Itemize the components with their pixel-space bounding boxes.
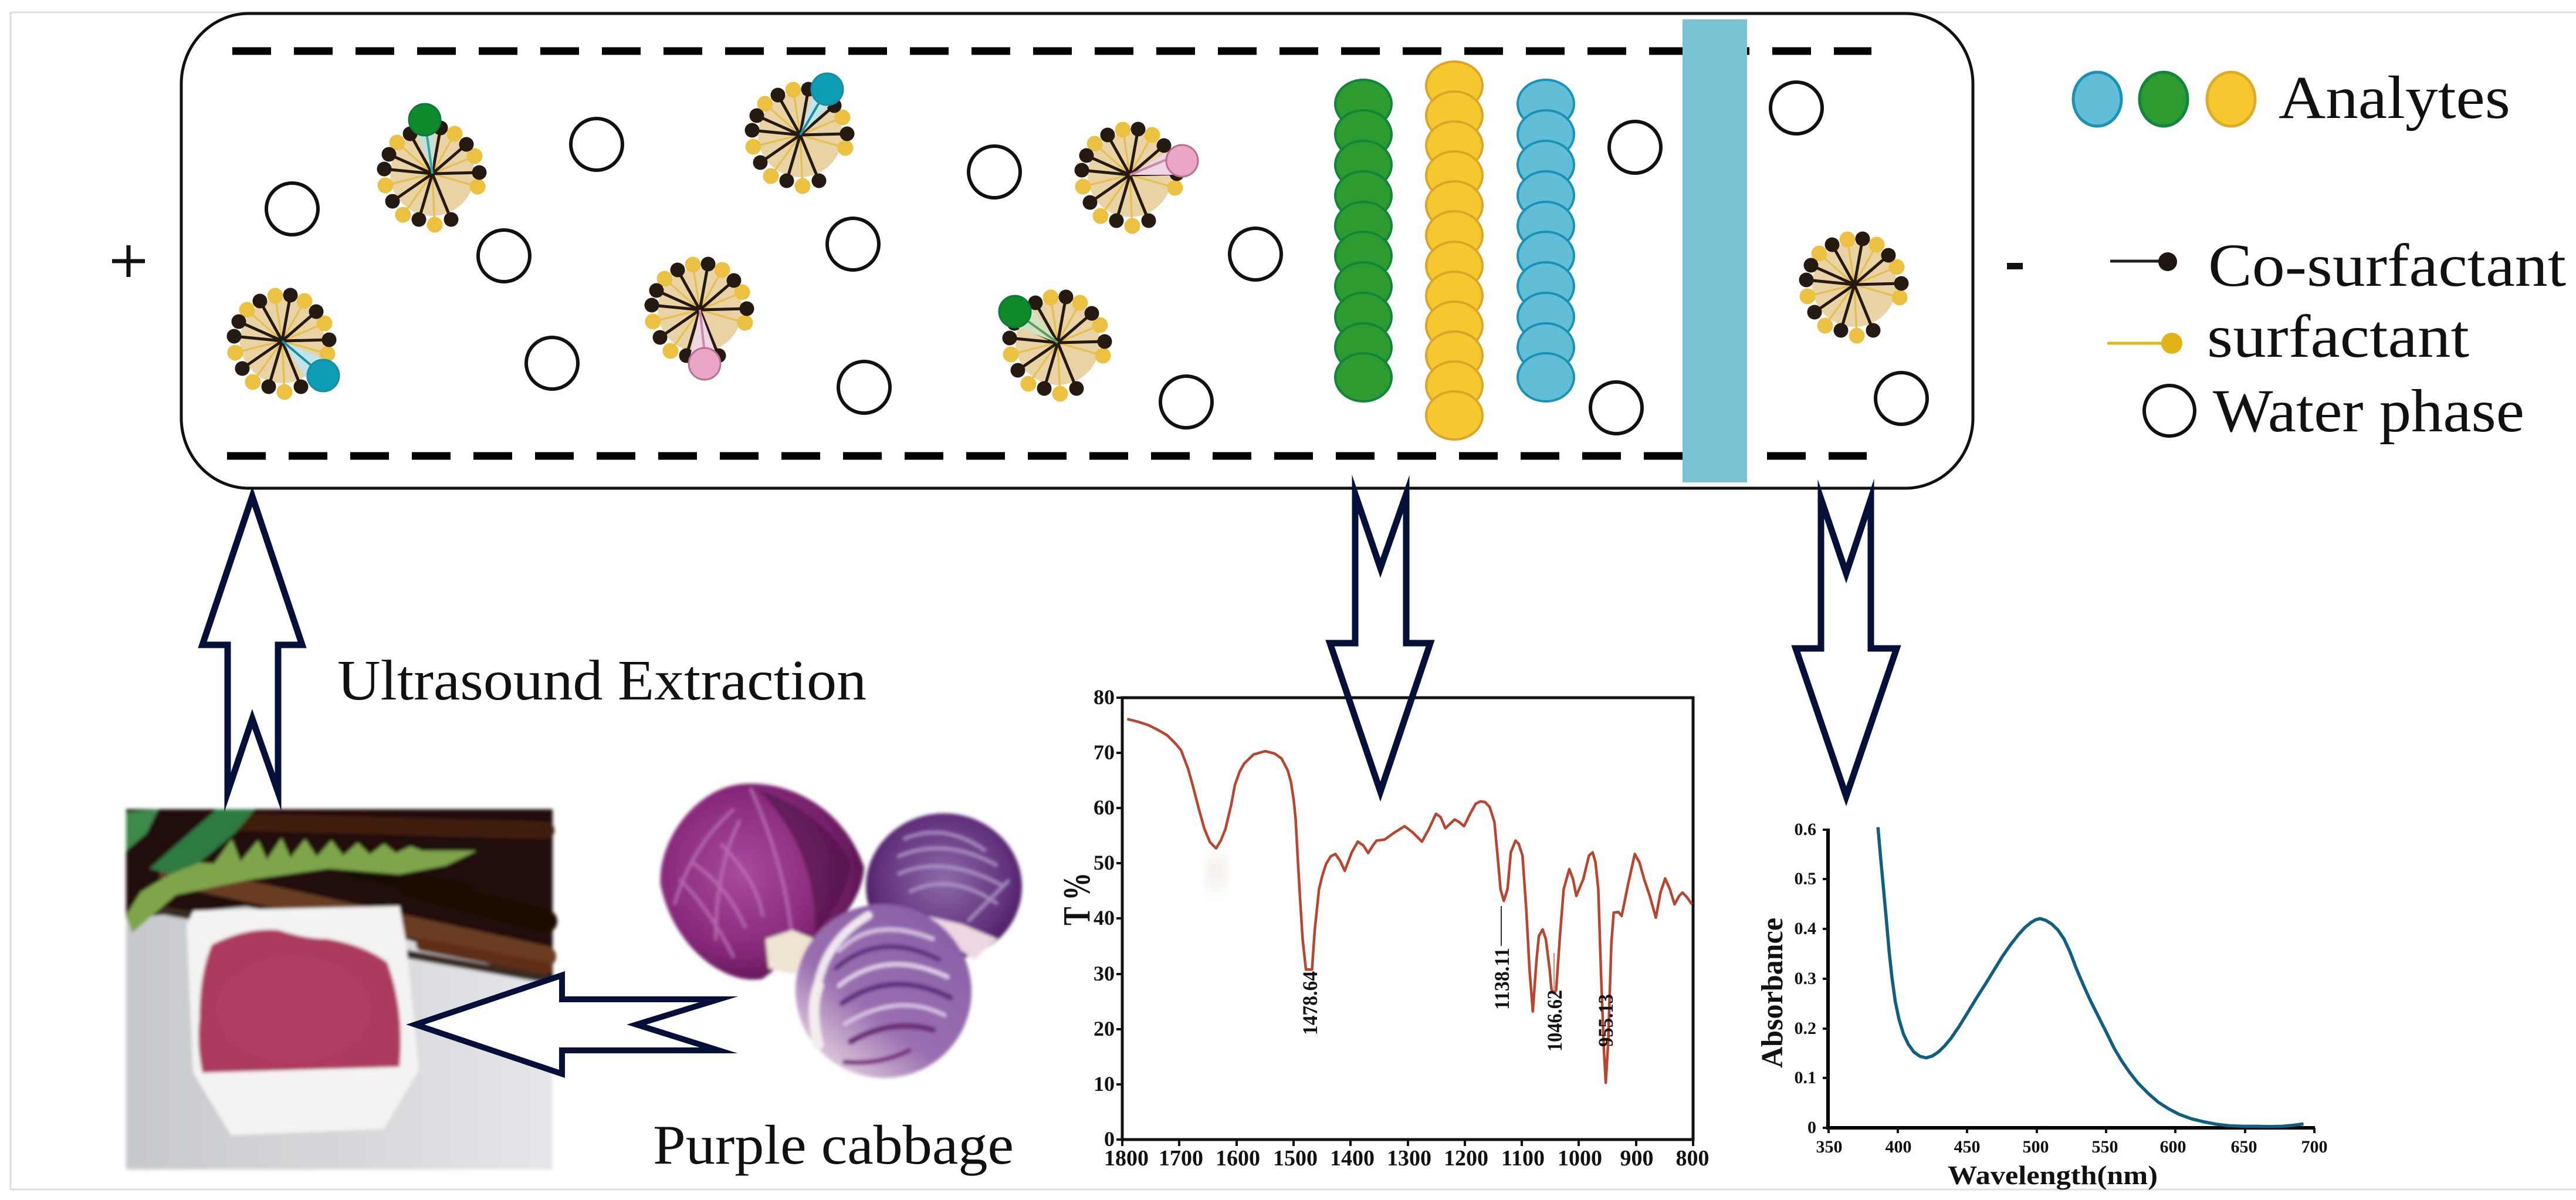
water phase droplets <box>266 82 1927 434</box>
IR: peak label 1478.64: 1478.64 <box>1298 971 1322 1035</box>
chart: IR spectrum <box>1055 685 1710 1171</box>
label: purple cabbage: Purple cabbage <box>653 1114 1014 1176</box>
UV: y axis labels: 0 <box>1807 1118 1816 1137</box>
panel: capillary tube <box>181 13 1973 488</box>
IR: y axis labels: 60 <box>1094 796 1115 819</box>
IR: plot frame <box>1122 698 1693 1140</box>
UV: y axis labels: 0.5 <box>1794 869 1816 888</box>
UV: y axis title: Absorbance <box>1756 918 1789 1068</box>
arrow: capillary to IR spectrum (down) <box>1330 494 1430 792</box>
IR: peak leader 1046.62 <box>1553 953 1555 989</box>
legend <box>2073 64 2566 445</box>
IR: x axis labels: 1500 <box>1273 1146 1318 1171</box>
IR: y axis labels: 70 <box>1094 741 1115 764</box>
IR: x axis labels: 1600 <box>1216 1146 1260 1171</box>
micelle with cyan analyte (top centre) <box>745 73 854 194</box>
micelle with green analyte (top left) <box>377 104 487 232</box>
micelle beyond the detection window <box>1799 231 1909 344</box>
chart: UV-Vis absorbance <box>1756 820 2328 1190</box>
IR: y axis labels: 40 <box>1094 906 1115 929</box>
IR: y axis labels: 0 <box>1104 1127 1115 1151</box>
legend: co-surfactant icon <box>2110 252 2177 271</box>
separated green analyte band <box>1335 80 1392 401</box>
IR: y axis labels: 50 <box>1094 851 1115 874</box>
legend: water phase icon <box>2144 386 2195 436</box>
cabbage: back right cut head <box>866 813 1022 960</box>
cabbage: large whole head <box>661 784 864 980</box>
IR: x axis labels <box>1104 1146 1710 1171</box>
IR: x axis labels: 800 <box>1675 1146 1710 1171</box>
UV: x axis labels: 700 <box>2301 1137 2328 1157</box>
IR: x axis labels: 1400 <box>1330 1146 1375 1171</box>
IR: x axis labels: 1200 <box>1444 1146 1488 1171</box>
UV: x axis labels: 450 <box>1954 1137 1981 1157</box>
IR: smudge below first dip <box>1209 855 1223 890</box>
separated yellow analyte band <box>1426 62 1482 440</box>
IR: x axis labels: 1000 <box>1558 1146 1602 1171</box>
UV: y axis labels <box>1794 820 1816 1137</box>
IR: y axis labels: 10 <box>1094 1072 1115 1096</box>
legend: analyte swatches <box>2073 72 2255 126</box>
UV: absorbance curve <box>1878 827 2303 1127</box>
cabbage: front cut head <box>780 888 987 1094</box>
dashed capillary wall: bottom <box>227 452 1867 460</box>
IR: peak label 1046.62: 1046.62 <box>1543 990 1566 1052</box>
IR: tick marks <box>1116 698 1693 1146</box>
IR: x axis labels: 1700 <box>1159 1146 1203 1171</box>
UV: y axis labels: 0.4 <box>1794 919 1816 938</box>
IR: x axis labels: 900 <box>1620 1146 1653 1171</box>
detection window bar <box>1683 19 1747 482</box>
UV: x axis labels: 550 <box>2092 1137 2118 1157</box>
IR: peak label 1138.11: 1138.11 <box>1490 948 1514 1010</box>
arrow: ultrasound extraction (up) <box>202 496 302 792</box>
IR: x axis labels: 1800 <box>1104 1146 1149 1171</box>
separated blue analyte band <box>1518 80 1574 401</box>
IR: y axis title: T % <box>1055 873 1098 925</box>
arrow: cabbage to powder (left) <box>415 975 719 1074</box>
photo: white dish <box>187 906 419 1135</box>
photo: fern corner <box>126 809 158 851</box>
arrow: capillary to UV spectrum (down) <box>1796 499 1897 796</box>
IR: peak leader 1138.11 <box>1501 906 1502 946</box>
IR: y axis labels: 80 <box>1094 685 1115 709</box>
IR: x axis labels: 1300 <box>1387 1146 1431 1171</box>
IR: spectrum curve <box>1127 719 1692 1083</box>
UV: axes <box>1828 829 2315 1128</box>
legend: surfactant label: surfactant <box>2207 303 2469 370</box>
IR: y axis labels: 30 <box>1094 962 1115 985</box>
IR: y axis labels <box>1094 685 1115 1151</box>
plus electrode sign <box>112 245 145 277</box>
UV: x axis labels <box>1816 1137 2328 1157</box>
IR: x axis labels: 1100 <box>1501 1146 1545 1171</box>
UV: tick marks <box>1823 830 2314 1133</box>
micelle with pink analyte (middle) <box>644 257 754 380</box>
micelle with cyan analyte (lower left) <box>226 288 339 400</box>
dashed capillary wall: top <box>232 47 1871 55</box>
photo: three purple cabbages <box>661 784 1022 1094</box>
legend: analytes label: Analytes <box>2279 64 2510 131</box>
legend: co-surfactant label: Co-surfactant <box>2208 232 2566 299</box>
UV: y axis labels: 0.2 <box>1794 1019 1816 1038</box>
photo: cabbage powder in a white dish <box>126 809 553 1169</box>
legend: surfactant icon <box>2107 333 2182 354</box>
IR: peak label 955.13: 955.13 <box>1594 994 1617 1047</box>
UV: x axis labels: 600 <box>2160 1137 2186 1157</box>
UV: x axis title: Wavelength(nm) <box>1948 1160 2158 1190</box>
UV: y axis labels: 0.1 <box>1794 1068 1816 1087</box>
legend: water phase label: Water phase <box>2213 377 2524 445</box>
IR: y axis labels: 20 <box>1094 1017 1115 1040</box>
UV: x axis labels: 650 <box>2230 1137 2257 1157</box>
photo: dark fern frond <box>150 809 255 874</box>
UV: x axis labels: 400 <box>1886 1137 1911 1157</box>
minus electrode sign <box>2007 263 2023 269</box>
micelle with green analyte (lower right) <box>999 290 1112 401</box>
label: ultrasound extraction: Ultrasound Extraction <box>337 649 866 712</box>
UV: y axis labels: 0.3 <box>1794 969 1816 988</box>
micelle with pink analyte (top right) <box>1075 122 1198 234</box>
UV: y axis labels: 0.6 <box>1794 820 1816 839</box>
UV: x axis labels: 500 <box>2023 1137 2049 1157</box>
UV: x axis labels: 350 <box>1816 1137 1842 1157</box>
cabbage: stem <box>766 930 814 974</box>
photo: powder <box>198 929 401 1073</box>
photo: fern frond <box>126 838 476 933</box>
